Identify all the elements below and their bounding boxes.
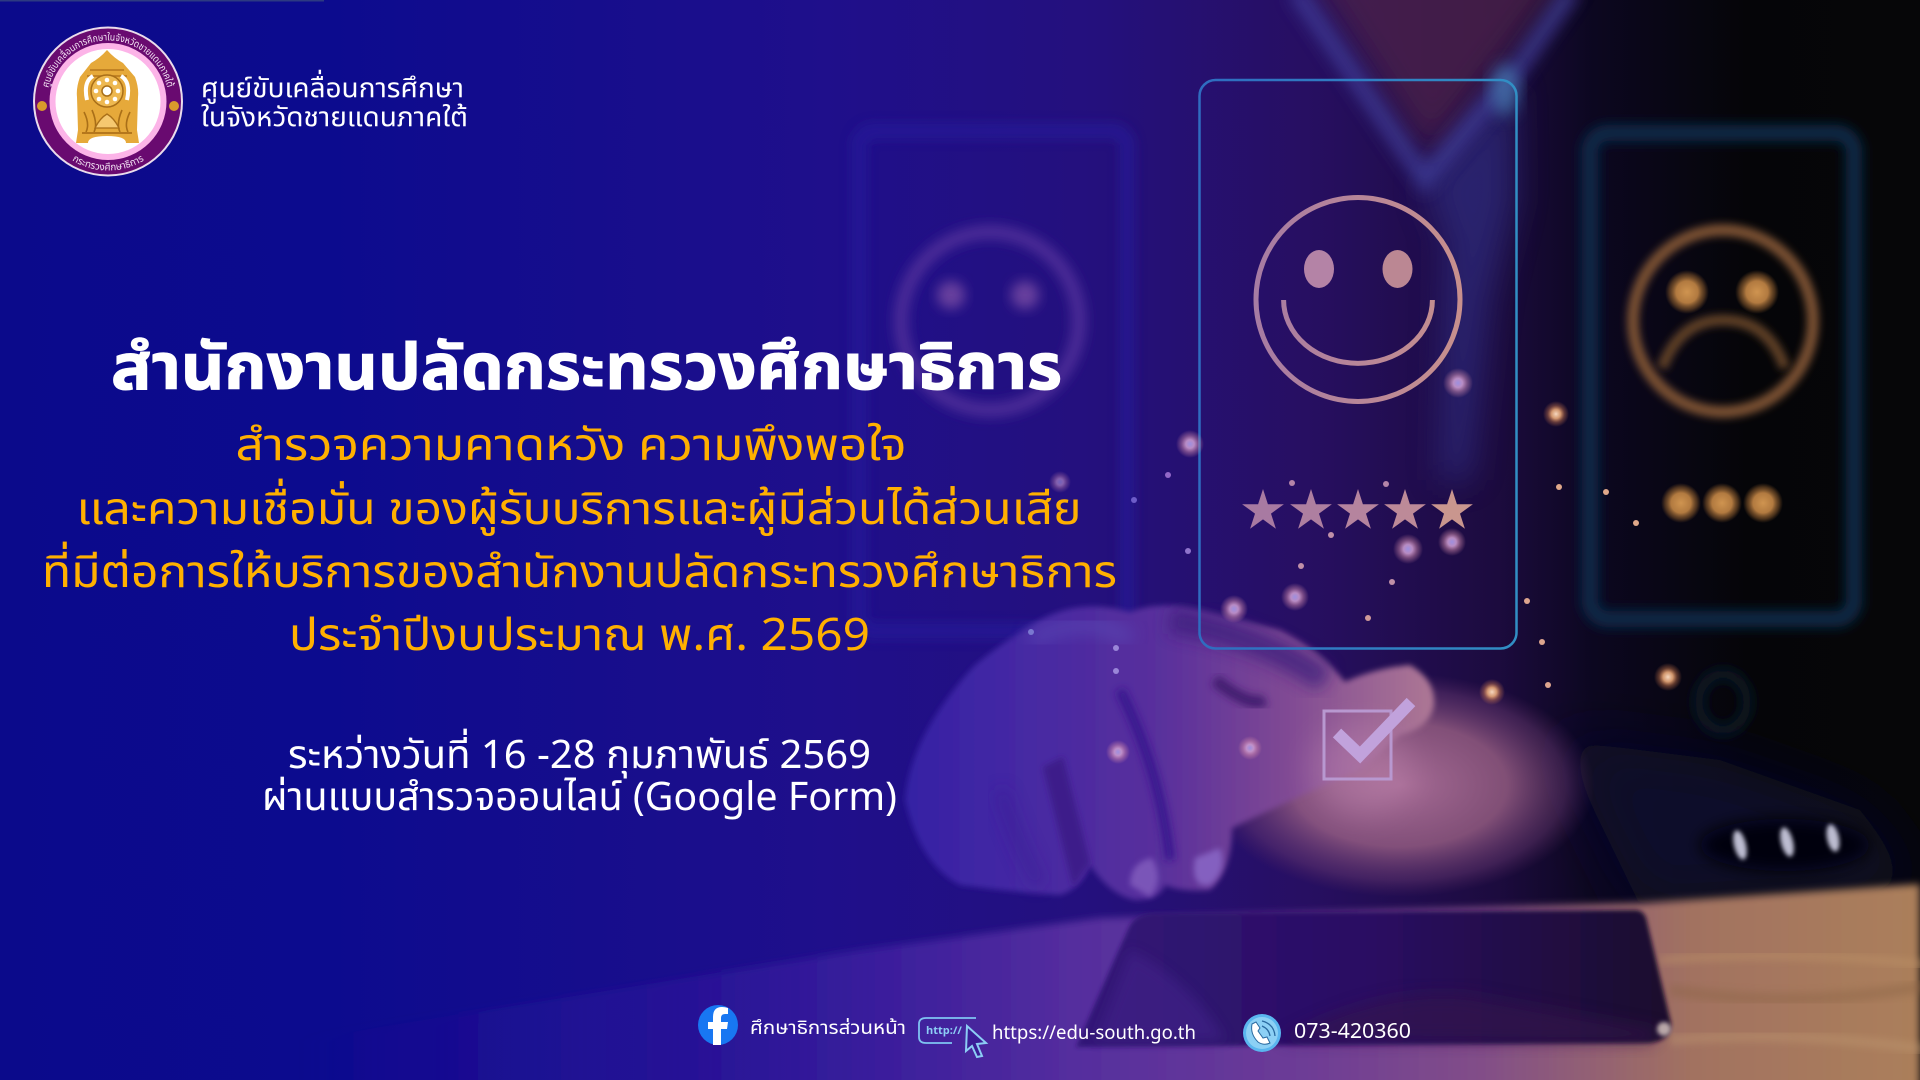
organisation name [201,69,468,139]
footer: telephone: 073-420360 [1294,1017,1411,1048]
footer: website [919,1018,1196,1057]
icon: http cursor: http:// [926,1022,962,1039]
five star rating [1242,489,1473,529]
ring text bottom: กระทรวงศึกษาธิการ [72,156,144,170]
organisation name: ศูนย์ขับเคลื่อนการศึกษา [201,69,464,110]
survey dates and channel [262,727,897,828]
subtitle: survey description: ประจำปีงบประมาณ พ.ศ. 2569 [289,603,870,671]
blurred right panel with sad face [1590,133,1854,619]
subtitle: survey description [42,413,1117,671]
ring text top: ศูนย์ขับเคลื่อนการศึกษาในจังหวัดชายแดนภาคใต้ [44,32,175,88]
organisation name: ในจังหวัดชายแดนภาคใต้ [201,98,468,139]
blurred left panel with smiley [859,131,1127,631]
hand pointing [905,605,1595,900]
subtitle: survey description: และความเชื่อมั่น ของผู้รับบริการและผู้มีส่วนได้ส่วนเสีย [76,477,1082,545]
survey dates and channel: ระหว่างวันที่ 16 -28 กุมภาพันธ์ 2569 [288,727,871,786]
icon: happy face [1256,198,1460,402]
subtitle: survey description: สำรวจความคาดหวัง ความพึงพอใจ [236,413,906,481]
background: wooden table [300,884,1920,1080]
logo: ministry emblem [33,26,183,176]
footer: facebook [698,1005,906,1045]
icon: telephone [1243,1014,1281,1052]
icon: http cursor [919,1018,986,1057]
icon: check box [1324,702,1411,779]
background: dark jacket sleeve [1560,674,1920,905]
gold emblem [76,50,139,143]
icon: facebook [698,1005,738,1045]
main rating panel outline [1200,80,1516,648]
footer: telephone [1243,1014,1411,1052]
footer: website: https://edu-south.go.th [992,1019,1196,1048]
title: สำนักงานปลัดกระทรวงศึกษาธิการ [111,321,1062,418]
smartphone on table [1076,910,1671,1047]
subtitle: survey description: ที่มีต่อการให้บริการของสำนักงานปลัดกระทรวงศึกษาธิการ [42,540,1117,608]
footer: facebook: ศึกษาธิการส่วนหน้า [750,1014,906,1043]
survey dates and channel: ผ่านแบบสำรวจออนไลน์ (Google Form) [262,769,897,828]
background: shirt and collar [1295,0,1580,480]
floating sparkles [1028,368,1682,764]
ring flowers [37,101,179,111]
